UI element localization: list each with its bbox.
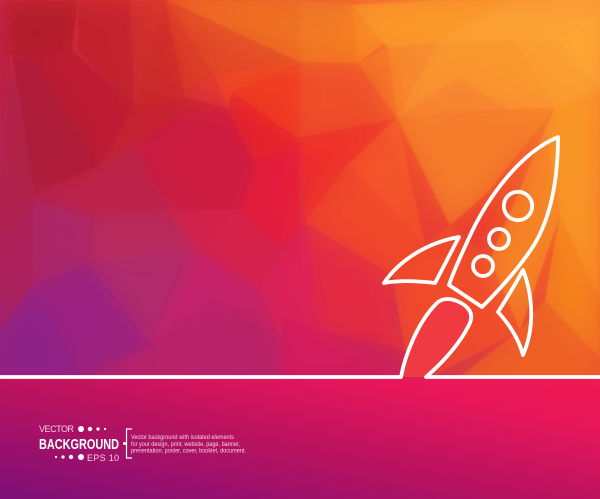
description [131,435,246,454]
rocket and ground line [0,137,600,377]
description: Vector background with isolated elements [131,435,234,441]
flame fill [402,298,471,377]
label: eps 10: EPS 10 [87,453,119,463]
right fin [498,270,531,355]
left fin [384,237,459,283]
ground line with flame [0,299,600,377]
window: small [473,256,493,276]
bracket [126,429,132,458]
description: for your design, print, website, page, banner, [131,442,240,448]
bracket pointer [123,442,126,445]
window: large [504,192,532,220]
dots: lower row [55,454,84,460]
rocket body [449,137,558,307]
dots: upper row [78,426,106,432]
description: presentation, poster, cover, booklet, document. [131,448,246,454]
bottom band [0,378,600,499]
caption block [39,424,246,463]
label: background: BACKGROUND [39,436,119,453]
label: vector: VECTOR [39,424,74,434]
window: medium [489,229,509,249]
